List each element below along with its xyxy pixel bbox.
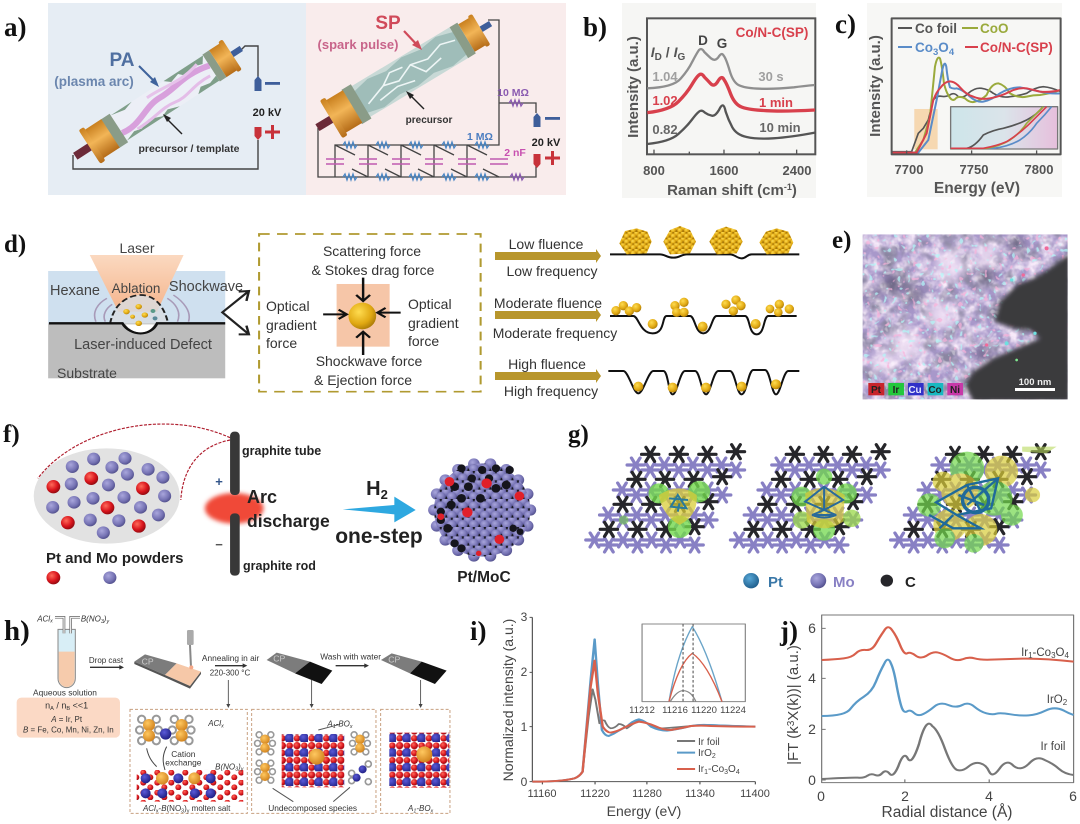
i text: Normalized intensity (a.u.) bbox=[500, 619, 516, 781]
legend text: C bbox=[905, 574, 916, 591]
f text labels: Arc bbox=[247, 487, 277, 507]
box 2: undecomposed species atoms: 1 bbox=[333, 724, 336, 730]
force labels: & Stokes drag force bbox=[312, 262, 435, 278]
box 1: molten salt atoms: x bbox=[156, 808, 159, 814]
i text: 1 bbox=[521, 720, 528, 734]
element legend tags bbox=[868, 383, 963, 395]
label c): c) bbox=[835, 9, 856, 39]
SP labels: precursor bbox=[406, 115, 452, 126]
element legend text: Pt bbox=[871, 385, 882, 396]
i text: Ir bbox=[698, 764, 704, 775]
fluence text: High frequency bbox=[504, 383, 598, 399]
SP labels: 2 nF bbox=[504, 147, 526, 159]
box 3: final catalyst atoms: -BO bbox=[416, 804, 431, 813]
box 2: undecomposed species atoms: A bbox=[327, 720, 333, 729]
f text labels bbox=[46, 444, 511, 586]
axes labels: 7750 bbox=[960, 162, 988, 177]
force labels: Optical bbox=[266, 298, 310, 314]
i text: Energy (eV) bbox=[607, 803, 681, 819]
lattice 3 bbox=[891, 445, 1057, 553]
legend text: 3 bbox=[933, 47, 938, 58]
series annotations: I bbox=[674, 44, 679, 60]
plot frame and curves bbox=[647, 18, 815, 154]
f text labels: Pt/MoC bbox=[457, 569, 511, 586]
text labels of ablation: Ablation bbox=[112, 281, 160, 296]
box 1: molten salt atoms: B(NO bbox=[161, 804, 181, 813]
i text: 1 bbox=[704, 769, 708, 776]
legend text: 4 bbox=[949, 47, 955, 58]
f text labels: − bbox=[215, 537, 223, 552]
box 3: final catalyst atoms bbox=[389, 733, 449, 814]
series annotations: I bbox=[651, 44, 656, 60]
j text: Radial distance (Å) bbox=[882, 804, 1012, 821]
element legend text: Co bbox=[928, 385, 942, 396]
axes labels: 7700 bbox=[895, 162, 923, 177]
element legend balls bbox=[743, 573, 893, 588]
test tube: 3 bbox=[101, 619, 104, 625]
force labels: gradient bbox=[408, 315, 459, 331]
force labels: & Ejection force bbox=[314, 372, 412, 388]
j text: 2 bbox=[1063, 698, 1068, 707]
label i): i) bbox=[470, 616, 486, 646]
f text labels: Pt and Mo powders bbox=[46, 550, 184, 567]
text labels of ablation: Laser bbox=[119, 240, 155, 256]
j text: 3 bbox=[1051, 651, 1056, 660]
precursor ratio box: n bbox=[45, 701, 50, 711]
test tube: ) bbox=[103, 615, 107, 624]
box 1: molten salt atoms: ) bbox=[237, 762, 241, 771]
PA labels and arrows: PA bbox=[110, 50, 135, 71]
box 3: final catalyst atoms: 1 bbox=[413, 808, 416, 814]
i text: 11216 bbox=[662, 705, 688, 716]
SP resistors and capacitors bbox=[326, 100, 524, 180]
legend text: Mo bbox=[833, 574, 855, 591]
plot with inset and curves bbox=[892, 18, 1061, 154]
PA circuit wiring bbox=[73, 46, 258, 169]
test tube: ACl bbox=[37, 614, 50, 623]
i text: 11160 bbox=[528, 788, 556, 800]
j text: 6 bbox=[808, 620, 816, 636]
series annotations: Co/N-C(SP) bbox=[736, 25, 808, 40]
box 1: molten salt atoms: B(NO bbox=[215, 762, 235, 771]
test tube: y bbox=[105, 619, 109, 625]
i text: 11212 bbox=[629, 705, 655, 716]
PA tube bbox=[64, 32, 252, 173]
force labels bbox=[266, 243, 459, 388]
j text: 4 bbox=[985, 788, 993, 804]
axes labels: Energy (eV) bbox=[934, 180, 1020, 197]
series annotations: D bbox=[698, 33, 708, 48]
i text: 3 bbox=[521, 610, 528, 624]
SP labels: 10 MΩ bbox=[497, 87, 529, 99]
box 1: molten salt atoms: y bbox=[187, 808, 190, 814]
series annotations: 0.82 bbox=[652, 122, 678, 137]
substrates with pipette bbox=[134, 630, 447, 689]
test tube bbox=[33, 614, 109, 697]
label e): e) bbox=[832, 227, 851, 254]
SP labels bbox=[318, 13, 561, 159]
box 1: molten salt atoms: y bbox=[240, 767, 244, 773]
force labels: Optical bbox=[408, 296, 452, 312]
shapes: hexane, substrate, laser cone, dome bbox=[48, 255, 225, 378]
dashed detail boxes bbox=[130, 709, 450, 813]
curves bbox=[532, 689, 755, 782]
panel c: XANES chart bbox=[867, 3, 1062, 197]
series annotations: 1 min bbox=[759, 95, 793, 110]
SP labels: (spark pulse) bbox=[318, 37, 398, 52]
i text bbox=[500, 610, 770, 819]
j text: 0 bbox=[817, 788, 825, 804]
element legend text: Ir bbox=[893, 385, 899, 396]
precursor ratio box bbox=[17, 698, 120, 738]
legend text: Co bbox=[915, 40, 933, 55]
element legend text bbox=[871, 385, 960, 396]
background: PA panel bbox=[48, 3, 306, 195]
lattice 2 bbox=[730, 445, 889, 552]
element legend text: Cu bbox=[908, 385, 922, 396]
f text labels: H bbox=[366, 478, 381, 500]
j text: 4 bbox=[808, 670, 816, 686]
i text: 3 bbox=[724, 769, 728, 776]
series annotations: 1.04 bbox=[652, 69, 678, 84]
axes labels bbox=[867, 35, 1053, 197]
blue arrow bbox=[343, 497, 416, 522]
text labels of ablation: Substrate bbox=[57, 365, 117, 381]
text labels of ablation: Hexane bbox=[50, 283, 100, 299]
Pt/MoC nanoparticle bbox=[428, 458, 536, 562]
label f): f) bbox=[3, 421, 20, 448]
legend text: O bbox=[938, 40, 949, 55]
j text: X(k))| (a.u.) bbox=[785, 645, 802, 721]
box 1: molten salt atoms bbox=[136, 716, 244, 814]
inset bbox=[642, 624, 745, 702]
SP labels: 20 kV bbox=[532, 137, 561, 149]
box 1: molten salt atoms: ACl bbox=[142, 804, 156, 813]
PA labels and arrows bbox=[54, 50, 240, 155]
process arrows and captions: 220-300 °C bbox=[210, 669, 250, 678]
legend text: Pt bbox=[768, 574, 783, 591]
f text labels: + bbox=[215, 474, 223, 489]
i text: 11220 bbox=[691, 705, 717, 716]
PA labels and arrows: precursor / template bbox=[139, 143, 240, 155]
precursor ratio box: B = Fe, Co, Mn, Ni, Zn, In bbox=[23, 726, 114, 735]
i text: -Co bbox=[708, 764, 725, 775]
precursor ratio box: A = Ir, Pt bbox=[50, 715, 83, 724]
precursor ratio box: <<1 bbox=[70, 701, 88, 711]
PA labels and arrows: (plasma arc) bbox=[54, 74, 134, 89]
legend text bbox=[915, 21, 1053, 58]
legend text: Co/N-C(SP) bbox=[980, 40, 1053, 55]
box 1: molten salt atoms: 3 bbox=[235, 767, 238, 773]
box 3: final catalyst atoms: x bbox=[430, 808, 434, 814]
series annotations bbox=[651, 25, 808, 137]
legend line swatches bbox=[898, 28, 978, 47]
process arrows and captions: Drop cast bbox=[89, 656, 124, 665]
label g): g) bbox=[568, 421, 589, 448]
j text: Ir foil bbox=[1041, 741, 1065, 753]
i text: 11280 bbox=[632, 788, 662, 800]
i text: IrO bbox=[698, 748, 712, 759]
box 1: molten salt atoms: 3 bbox=[181, 808, 184, 814]
SP circuit wiring bbox=[318, 20, 536, 177]
panel b: Raman spectra chart bbox=[622, 3, 816, 199]
substrates with pipette: CP bbox=[273, 654, 286, 664]
label a): a) bbox=[4, 12, 26, 42]
i text: 2 bbox=[521, 665, 528, 679]
test tube: B(NO bbox=[81, 615, 101, 624]
f text labels: graphite rod bbox=[243, 559, 316, 573]
legend text: CoO bbox=[980, 21, 1008, 36]
f text labels: 2 bbox=[381, 487, 388, 502]
precursor ratio box: / n bbox=[54, 701, 66, 711]
j text: 6 bbox=[1069, 788, 1077, 804]
series annotations: 30 s bbox=[758, 69, 784, 84]
element legend text: Ni bbox=[950, 385, 960, 396]
curves bbox=[822, 627, 1074, 662]
i text: 0 bbox=[521, 775, 528, 789]
force labels: force bbox=[266, 335, 297, 351]
j text: 2 bbox=[808, 721, 816, 737]
panel d: laser ablation schematic bbox=[48, 240, 249, 381]
axes labels: Intensity (a.u.) bbox=[867, 35, 884, 137]
series annotations: / bbox=[662, 44, 674, 60]
test tube: Aqueous solution bbox=[33, 687, 97, 697]
SP labels: SP bbox=[375, 13, 401, 34]
SP tube bbox=[306, 5, 502, 146]
fluence text: Low fluence bbox=[509, 236, 584, 252]
precursor ratio box: A bbox=[50, 706, 54, 712]
legend text: Co foil bbox=[915, 21, 957, 36]
precursor ratio box: B bbox=[66, 706, 70, 712]
axis titles and tick labels: Intensity (a.u.) bbox=[625, 36, 642, 138]
frame bbox=[822, 615, 1074, 783]
j text: -Co bbox=[1033, 647, 1051, 659]
box 1: molten salt atoms: exchange bbox=[165, 758, 202, 768]
box 3: final catalyst atoms: A bbox=[408, 804, 413, 813]
box 2: undecomposed species atoms: x bbox=[349, 724, 353, 730]
j text: Ir bbox=[1021, 647, 1028, 659]
axis titles and tick labels: ) bbox=[792, 182, 797, 199]
scale bar bbox=[1015, 377, 1055, 391]
box 2: undecomposed species atoms: -BO bbox=[336, 720, 350, 729]
box 1: molten salt atoms: molten salt bbox=[189, 804, 231, 813]
legend lines bbox=[677, 738, 695, 744]
panel f: arc discharge synthesis of Pt/MoC bbox=[34, 424, 536, 586]
j text: 1 bbox=[1028, 651, 1033, 660]
j text: 3 bbox=[786, 720, 797, 726]
background: SP panel bbox=[306, 3, 566, 195]
text labels of ablation: Laser-induced Defect bbox=[74, 337, 212, 353]
force labels: gradient bbox=[266, 317, 317, 333]
axis titles and tick labels: 800 bbox=[643, 163, 665, 178]
f text labels: graphite tube bbox=[242, 444, 321, 458]
series annotations: 10 min bbox=[759, 120, 801, 135]
fluence text: Low frequency bbox=[506, 263, 598, 279]
j text: 2 bbox=[901, 788, 909, 804]
gold arrows bbox=[495, 249, 601, 383]
process arrows and captions bbox=[89, 652, 423, 708]
PA voltage terminals bbox=[253, 76, 282, 140]
panel g: charge density lattices bbox=[586, 445, 1057, 591]
axes labels: 7800 bbox=[1025, 162, 1053, 177]
graphite electrodes bbox=[230, 432, 240, 576]
axis titles and tick labels: 2400 bbox=[783, 163, 811, 178]
box 1: molten salt atoms: ACl bbox=[208, 719, 221, 728]
substrates with pipette: CP bbox=[142, 656, 154, 666]
text labels of ablation: Shockwave bbox=[169, 279, 243, 295]
series annotations: G bbox=[717, 36, 727, 51]
i text: 11340 bbox=[685, 788, 715, 800]
force labels: Scattering force bbox=[323, 243, 421, 259]
box 2: undecomposed species atoms: Undecomposed species bbox=[268, 803, 357, 813]
scale bar: 100 nm bbox=[1019, 377, 1051, 388]
i text: 11220 bbox=[580, 788, 610, 800]
force labels: force bbox=[408, 333, 439, 349]
process arrows and captions: Annealing in air bbox=[202, 653, 260, 663]
box 1: molten salt atoms: x bbox=[220, 723, 224, 729]
i text: 11400 bbox=[740, 788, 770, 800]
axis titles and tick labels bbox=[625, 36, 811, 199]
test tube: x bbox=[49, 619, 53, 625]
fluence text: High fluence bbox=[508, 356, 586, 372]
box 1: molten salt atoms: ) bbox=[184, 804, 187, 813]
axis titles and tick labels: 1600 bbox=[710, 163, 738, 178]
series annotations: 1.02 bbox=[652, 93, 678, 108]
PA voltage terminals: 20 kV bbox=[253, 107, 282, 119]
j text: IrO bbox=[1047, 694, 1063, 706]
substrate lines and gold particles bbox=[608, 226, 799, 394]
i text: 4 bbox=[736, 769, 740, 776]
i text: Ir foil bbox=[698, 737, 720, 748]
axes bbox=[530, 617, 755, 784]
panel j: EXAFS radial distance chart bbox=[785, 615, 1077, 821]
powders ellipse with spheres bbox=[34, 424, 230, 584]
arc glow bbox=[205, 493, 263, 524]
fluence text bbox=[493, 236, 617, 399]
box 1: molten salt atoms: Cation bbox=[171, 749, 196, 759]
legend text bbox=[768, 574, 916, 591]
f text labels: one-step bbox=[335, 525, 423, 548]
panel d: force diagram in dashed box bbox=[259, 234, 481, 392]
label d): d) bbox=[4, 231, 26, 258]
f text labels: discharge bbox=[247, 511, 330, 531]
j text bbox=[785, 620, 1077, 821]
j text: 4 bbox=[1064, 651, 1069, 660]
arrows to force box bbox=[222, 291, 249, 334]
panel h: molten salt synthesis flowchart bbox=[17, 614, 450, 814]
panel e: elemental mapping micrograph bbox=[863, 234, 1070, 402]
series annotations: G bbox=[677, 52, 685, 63]
fluence text: Moderate frequency bbox=[493, 325, 617, 341]
box 2: undecomposed species atoms bbox=[255, 720, 371, 813]
axis titles and tick labels: -1 bbox=[784, 182, 792, 192]
force labels: Shockwave force bbox=[316, 353, 423, 369]
process arrows and captions: Wash with water bbox=[320, 652, 381, 662]
label h): h) bbox=[4, 615, 30, 647]
SP voltage terminals bbox=[534, 113, 560, 168]
panel d: fluence conditions bbox=[493, 226, 799, 399]
panel a: plasma arc vs spark pulse tube schematics bbox=[4, 3, 566, 195]
axis titles and tick labels: Raman shift (cm bbox=[667, 182, 784, 199]
substrates with pipette: CP bbox=[388, 655, 401, 665]
series annotations: D bbox=[655, 52, 662, 63]
box 1: molten salt atoms: - bbox=[159, 804, 162, 813]
panel i: normalized XANES chart bbox=[500, 610, 770, 819]
label b): b) bbox=[583, 12, 607, 42]
fluence text: Moderate fluence bbox=[494, 295, 602, 311]
label j): j) bbox=[779, 616, 798, 646]
lattice 1 bbox=[586, 445, 745, 552]
j text: |FT (k bbox=[785, 726, 802, 765]
i text: O bbox=[728, 764, 736, 775]
j text: 0 bbox=[808, 772, 816, 788]
SP labels: 1 MΩ bbox=[467, 131, 493, 143]
i text: 2 bbox=[712, 753, 716, 760]
j text: O bbox=[1056, 647, 1065, 659]
i text: 11224 bbox=[720, 705, 746, 716]
text labels of ablation bbox=[50, 240, 243, 381]
